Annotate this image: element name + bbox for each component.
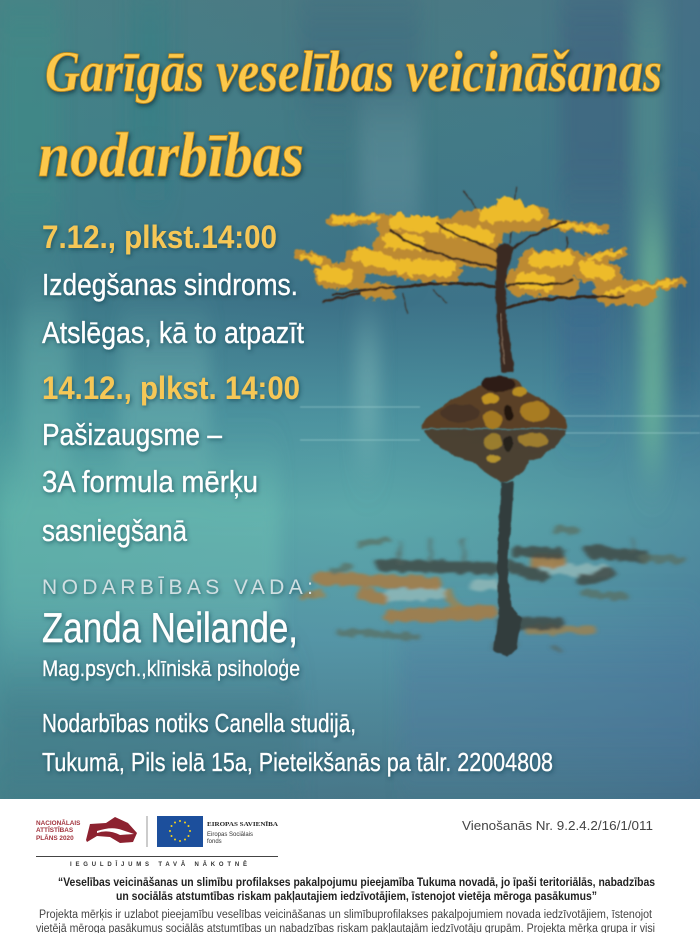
project description: Projekta mērķis ir uzlabot pieejamību veselības veicināšanas un slimībuprofilakses pakalpojumiem novada iedzīvotājiem, īstenojot xyxy=(39,909,653,921)
project description xyxy=(36,909,655,933)
session one xyxy=(42,219,304,350)
presenter xyxy=(42,576,313,681)
session one topic: Atslēgas, kā to atpazīt xyxy=(42,315,304,350)
tree reflection in water xyxy=(303,482,683,657)
island rock xyxy=(421,376,567,429)
logo: Nacionālais attīstības plāns 2020: NACIONĀLAIS xyxy=(36,819,81,827)
presenter label: NODARBĪBAS VADA: xyxy=(42,576,313,599)
tree foliage bright layer xyxy=(303,203,677,293)
session two xyxy=(42,370,300,548)
water ripples xyxy=(300,407,700,440)
presenter title: Mag.psych.,klīniskā psiholoģe xyxy=(42,656,300,681)
reflected trunk xyxy=(493,482,522,657)
logo: Nacionālais attīstības plāns 2020: ATTĪSTĪBAS xyxy=(36,826,74,834)
presenter name: Zanda Neilande, xyxy=(42,604,298,651)
logo: European Union flag: EIROPAS SAVIENĪBA xyxy=(207,821,278,828)
logo: Nacionālais attīstības plāns 2020 xyxy=(36,817,137,843)
tree branches over foliage xyxy=(333,222,623,308)
logo: European Union flag xyxy=(146,816,278,847)
title xyxy=(38,39,662,190)
venue and registration: Nodarbības notiks Canella studijā, xyxy=(42,708,356,738)
reflected foliage xyxy=(303,530,683,650)
island reflection xyxy=(423,429,567,483)
session two topic: sasniegšanā xyxy=(42,513,188,548)
session one date: 7.12., plkst.14:00 xyxy=(42,219,277,255)
session two topic: 3A formula mērķu xyxy=(42,464,258,499)
project quote xyxy=(58,877,655,903)
tree foliage amber layer xyxy=(300,207,682,293)
logo: European Union flag: Eiropas Sociālais xyxy=(207,832,253,838)
tree trunk xyxy=(496,244,514,373)
session one topic: Izdegšanas sindroms. xyxy=(42,267,298,302)
session two date: 14.12., plkst. 14:00 xyxy=(42,370,300,406)
project quote: un sociālās atstumtības riskam pakļautajiem iedzīvotājiem, īstenojot vietēja mēroga pasākumus” xyxy=(116,891,597,903)
project quote: “Veselības veicināšanas un slimību profilakses pakalpojumu pieejamība Tukuma novadā, jo īpaši teritoriālās, nabadzības xyxy=(58,877,655,889)
logo: Nacionālais attīstības plāns 2020: PLĀNS 2020 xyxy=(36,834,74,842)
venue and registration xyxy=(42,708,553,777)
title: nodarbības xyxy=(38,119,304,190)
session two topic: Pašizaugsme – xyxy=(42,417,223,452)
slogan: ieguldījums tavā nākotnē: IEGULDĪJUMS TAVĀ NĀKOTNĒ xyxy=(70,861,247,868)
logo: European Union flag: fonds xyxy=(207,839,222,845)
tree branches behind foliage xyxy=(323,187,623,313)
tree photograph xyxy=(300,187,682,483)
agreement number: Vienošanās Nr. 9.2.4.2/16/1/011 xyxy=(462,818,653,833)
venue and registration: Tukumā, Pils ielā 15a, Pieteikšanās pa tālr. 22004808 xyxy=(42,747,553,777)
footer panel xyxy=(0,799,700,933)
